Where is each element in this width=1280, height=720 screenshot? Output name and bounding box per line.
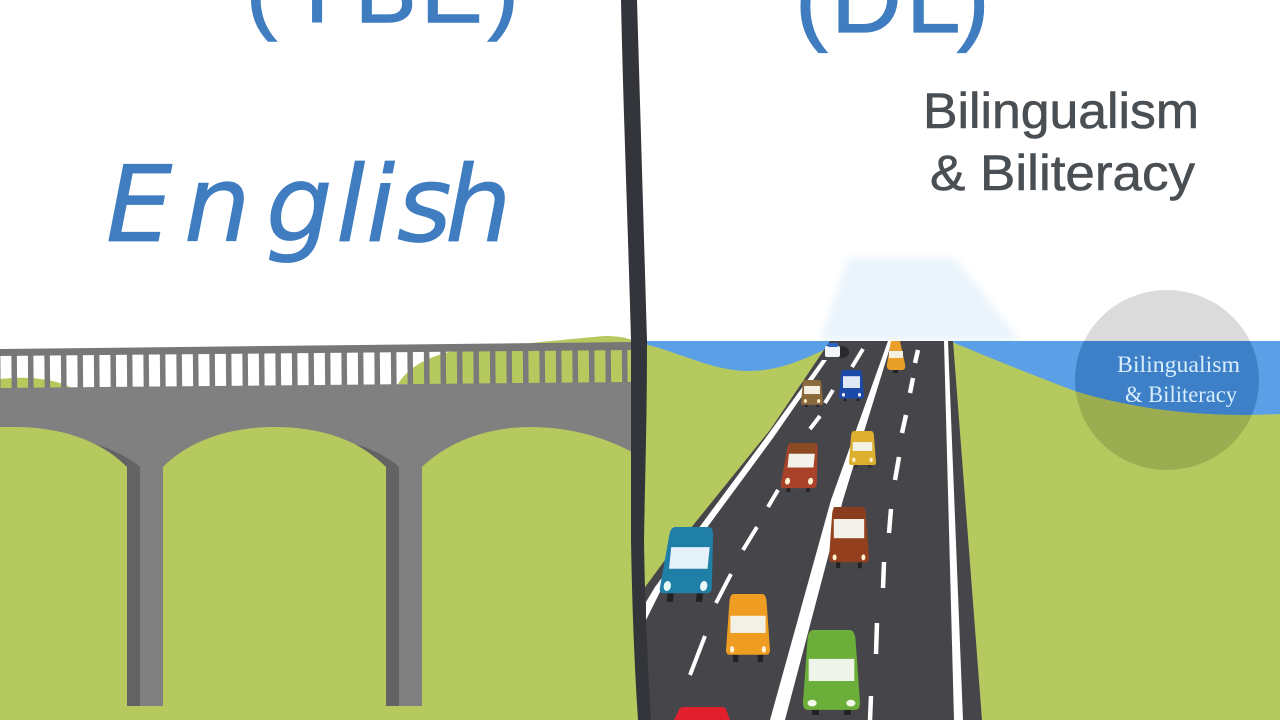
bridge deck and piers — [0, 382, 632, 706]
circle caption: & Biliteracy — [1125, 382, 1237, 407]
callout circle — [1075, 290, 1259, 470]
pier shadow left — [95, 444, 140, 706]
car: red — [674, 707, 730, 720]
circle water tint — [1075, 341, 1259, 415]
bridge — [0, 342, 632, 706]
car: yellow — [849, 431, 876, 468]
car: orange — [726, 594, 770, 662]
bridge top rail — [0, 342, 632, 356]
car: blue — [658, 527, 718, 602]
car: amber — [887, 341, 905, 373]
car: brown red — [829, 507, 869, 568]
panel: right DL highway scene — [640, 0, 1280, 720]
road — [640, 341, 982, 720]
green hills — [640, 342, 1280, 720]
distant sky glow — [820, 258, 1020, 341]
heading: Bilingualism and Biliteracy — [923, 83, 1199, 201]
hills behind bridge — [0, 336, 632, 392]
road edge lines — [646, 341, 963, 720]
center divider — [621, 0, 651, 720]
heading: English: English — [106, 144, 512, 266]
car: green — [803, 630, 860, 715]
pier shadow right — [355, 444, 399, 706]
heading: Bilingualism and Biliteracy: & Biliteracy — [930, 145, 1195, 201]
car: brown small — [801, 380, 823, 407]
ground — [0, 420, 640, 720]
heading: Bilingualism and Biliteracy: Bilingualism — [923, 83, 1199, 139]
car: rust red — [780, 443, 821, 492]
circle caption — [1117, 352, 1240, 407]
circle caption: Bilingualism — [1117, 352, 1240, 377]
circle tint — [1075, 290, 1259, 470]
car: navy — [839, 370, 864, 401]
panel: left TBE bridge scene — [0, 0, 640, 720]
car: white small — [825, 343, 849, 358]
bridge railing — [0, 365, 632, 371]
water — [640, 341, 1280, 421]
lane dashes — [690, 349, 918, 720]
